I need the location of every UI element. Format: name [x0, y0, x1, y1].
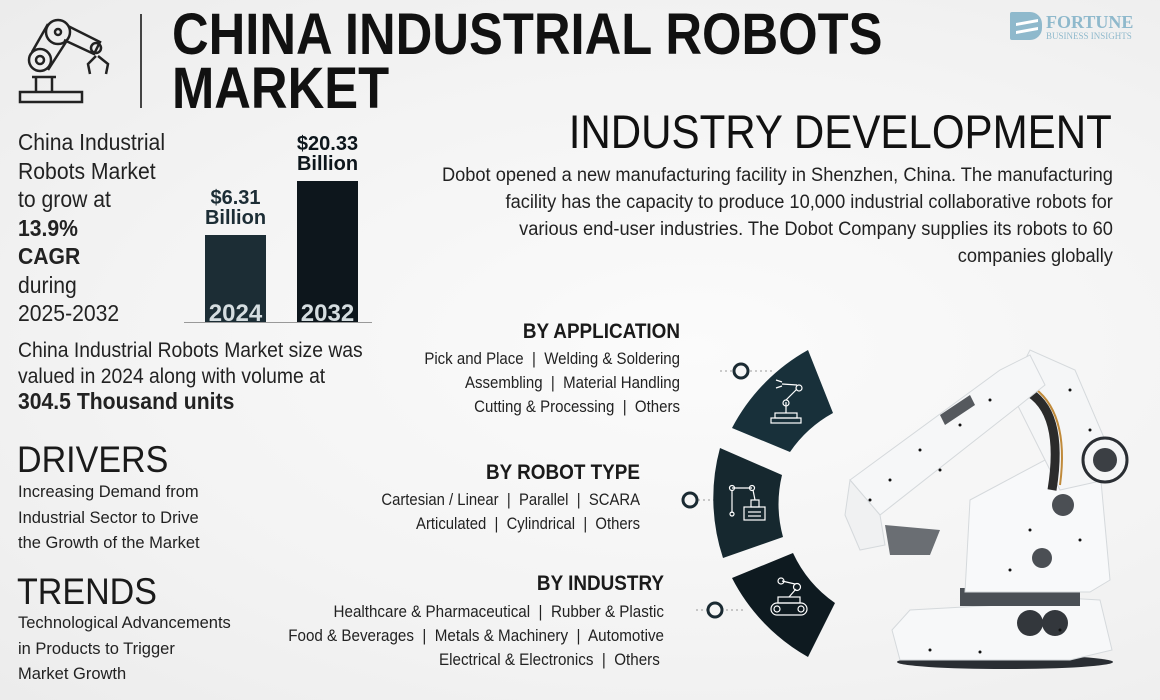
text: CAGR summary: to grow at [18, 186, 111, 212]
text: drivers: Industrial Sector to Drive [18, 508, 199, 526]
bar 2032 [297, 181, 358, 323]
segment: by application: Cutting & Processing | Others [474, 398, 680, 416]
segment: by robot type: BY ROBOT TYPE [486, 461, 640, 484]
text: industry development: companies globally [958, 246, 1113, 267]
logo: Fortune Business Insights [1010, 12, 1133, 41]
segment: by industry: Food & Beverages | Metals & Machinery | Automotive [288, 627, 664, 645]
segment: by industry: BY INDUSTRY [537, 572, 664, 595]
icon: robot arm header [18, 18, 110, 104]
text: drivers [18, 483, 200, 552]
text: market volume: China Industrial Robots Market size was [18, 339, 363, 362]
segment: by robot type: Articulated | Cylindrical | Others [416, 515, 640, 533]
connector dots [696, 371, 775, 610]
icon: gantry robot [730, 486, 765, 520]
segment: by robot type [381, 461, 640, 533]
heading: trends: TRENDS [17, 571, 157, 612]
circle markers [683, 364, 748, 617]
title [172, 2, 882, 121]
image: industrial robot [844, 350, 1128, 669]
title: MARKET [172, 56, 389, 121]
text: CAGR summary: 2025-2032 [18, 300, 119, 326]
text: market volume [18, 339, 363, 414]
text: industry development: Dobot opened a new manufacturing facility in Shenzhen, China. The manufacturing [442, 165, 1113, 186]
icon: mobile robot [771, 578, 807, 615]
segment: by industry: Electrical & Electronics | Others [439, 651, 660, 669]
segment: by application [424, 320, 680, 416]
heading: industry development: INDUSTRY DEVELOPMENT [569, 105, 1112, 158]
arc: industry [732, 553, 835, 657]
segment: by industry [288, 572, 664, 669]
title: CHINA INDUSTRIAL ROBOTS [172, 2, 882, 67]
text: drivers: Increasing Demand from [18, 483, 199, 501]
label 2024: Billion [205, 207, 266, 229]
text: industry development: various end-user industries. The Dobot Company supplies its robots to 60 [519, 219, 1113, 240]
text: CAGR summary: CAGR [18, 243, 80, 269]
text: CAGR summary: Robots Market [18, 158, 156, 184]
text: market volume: 304.5 Thousand units [18, 388, 234, 414]
label 2032: Billion [297, 153, 358, 175]
label 2032: $20.33 [297, 133, 358, 155]
arc: robot type [713, 448, 783, 558]
text: trends: Technological Advancements [18, 614, 231, 632]
label 2032 [297, 133, 358, 175]
bar 2024 [205, 235, 266, 323]
text: CAGR summary: China Industrial [18, 129, 165, 155]
bar chart [184, 133, 372, 323]
icon: robot arm wrench [771, 380, 802, 423]
label 2024 [205, 187, 266, 229]
segment: by industry: Healthcare & Pharmaceutical | Rubber & Plastic [334, 603, 664, 621]
text: CAGR summary: during [18, 272, 77, 298]
segment: by application: Assembling | Material Handling [465, 374, 680, 392]
heading: drivers: DRIVERS [17, 439, 168, 480]
text: drivers: the Growth of the Market [18, 534, 200, 552]
text: trends [18, 614, 231, 683]
text: trends: in Products to Trigger [18, 640, 175, 658]
segment: by application: Pick and Place | Welding & Soldering [424, 350, 680, 368]
text: industry development [442, 165, 1113, 267]
segment: by robot type: Cartesian / Linear | Parallel | SCARA [381, 491, 640, 509]
label 2024: $6.31 [210, 187, 261, 209]
divider line [140, 14, 142, 108]
logo: Fortune Business Insights: FORTUNE [1046, 12, 1133, 32]
text: CAGR summary [18, 129, 165, 326]
text: CAGR summary: 13.9% [18, 214, 78, 240]
text: trends: Market Growth [18, 665, 126, 683]
logo: Fortune Business Insights: BUSINESS INSIGHTS [1046, 31, 1132, 41]
text: market volume: valued in 2024 along with volume at [18, 364, 325, 388]
arc: application [732, 350, 833, 452]
text: industry development: facility has the capacity to produce 10,000 industrial collaborative robots for [506, 192, 1113, 213]
segment: by application: BY APPLICATION [523, 320, 680, 343]
